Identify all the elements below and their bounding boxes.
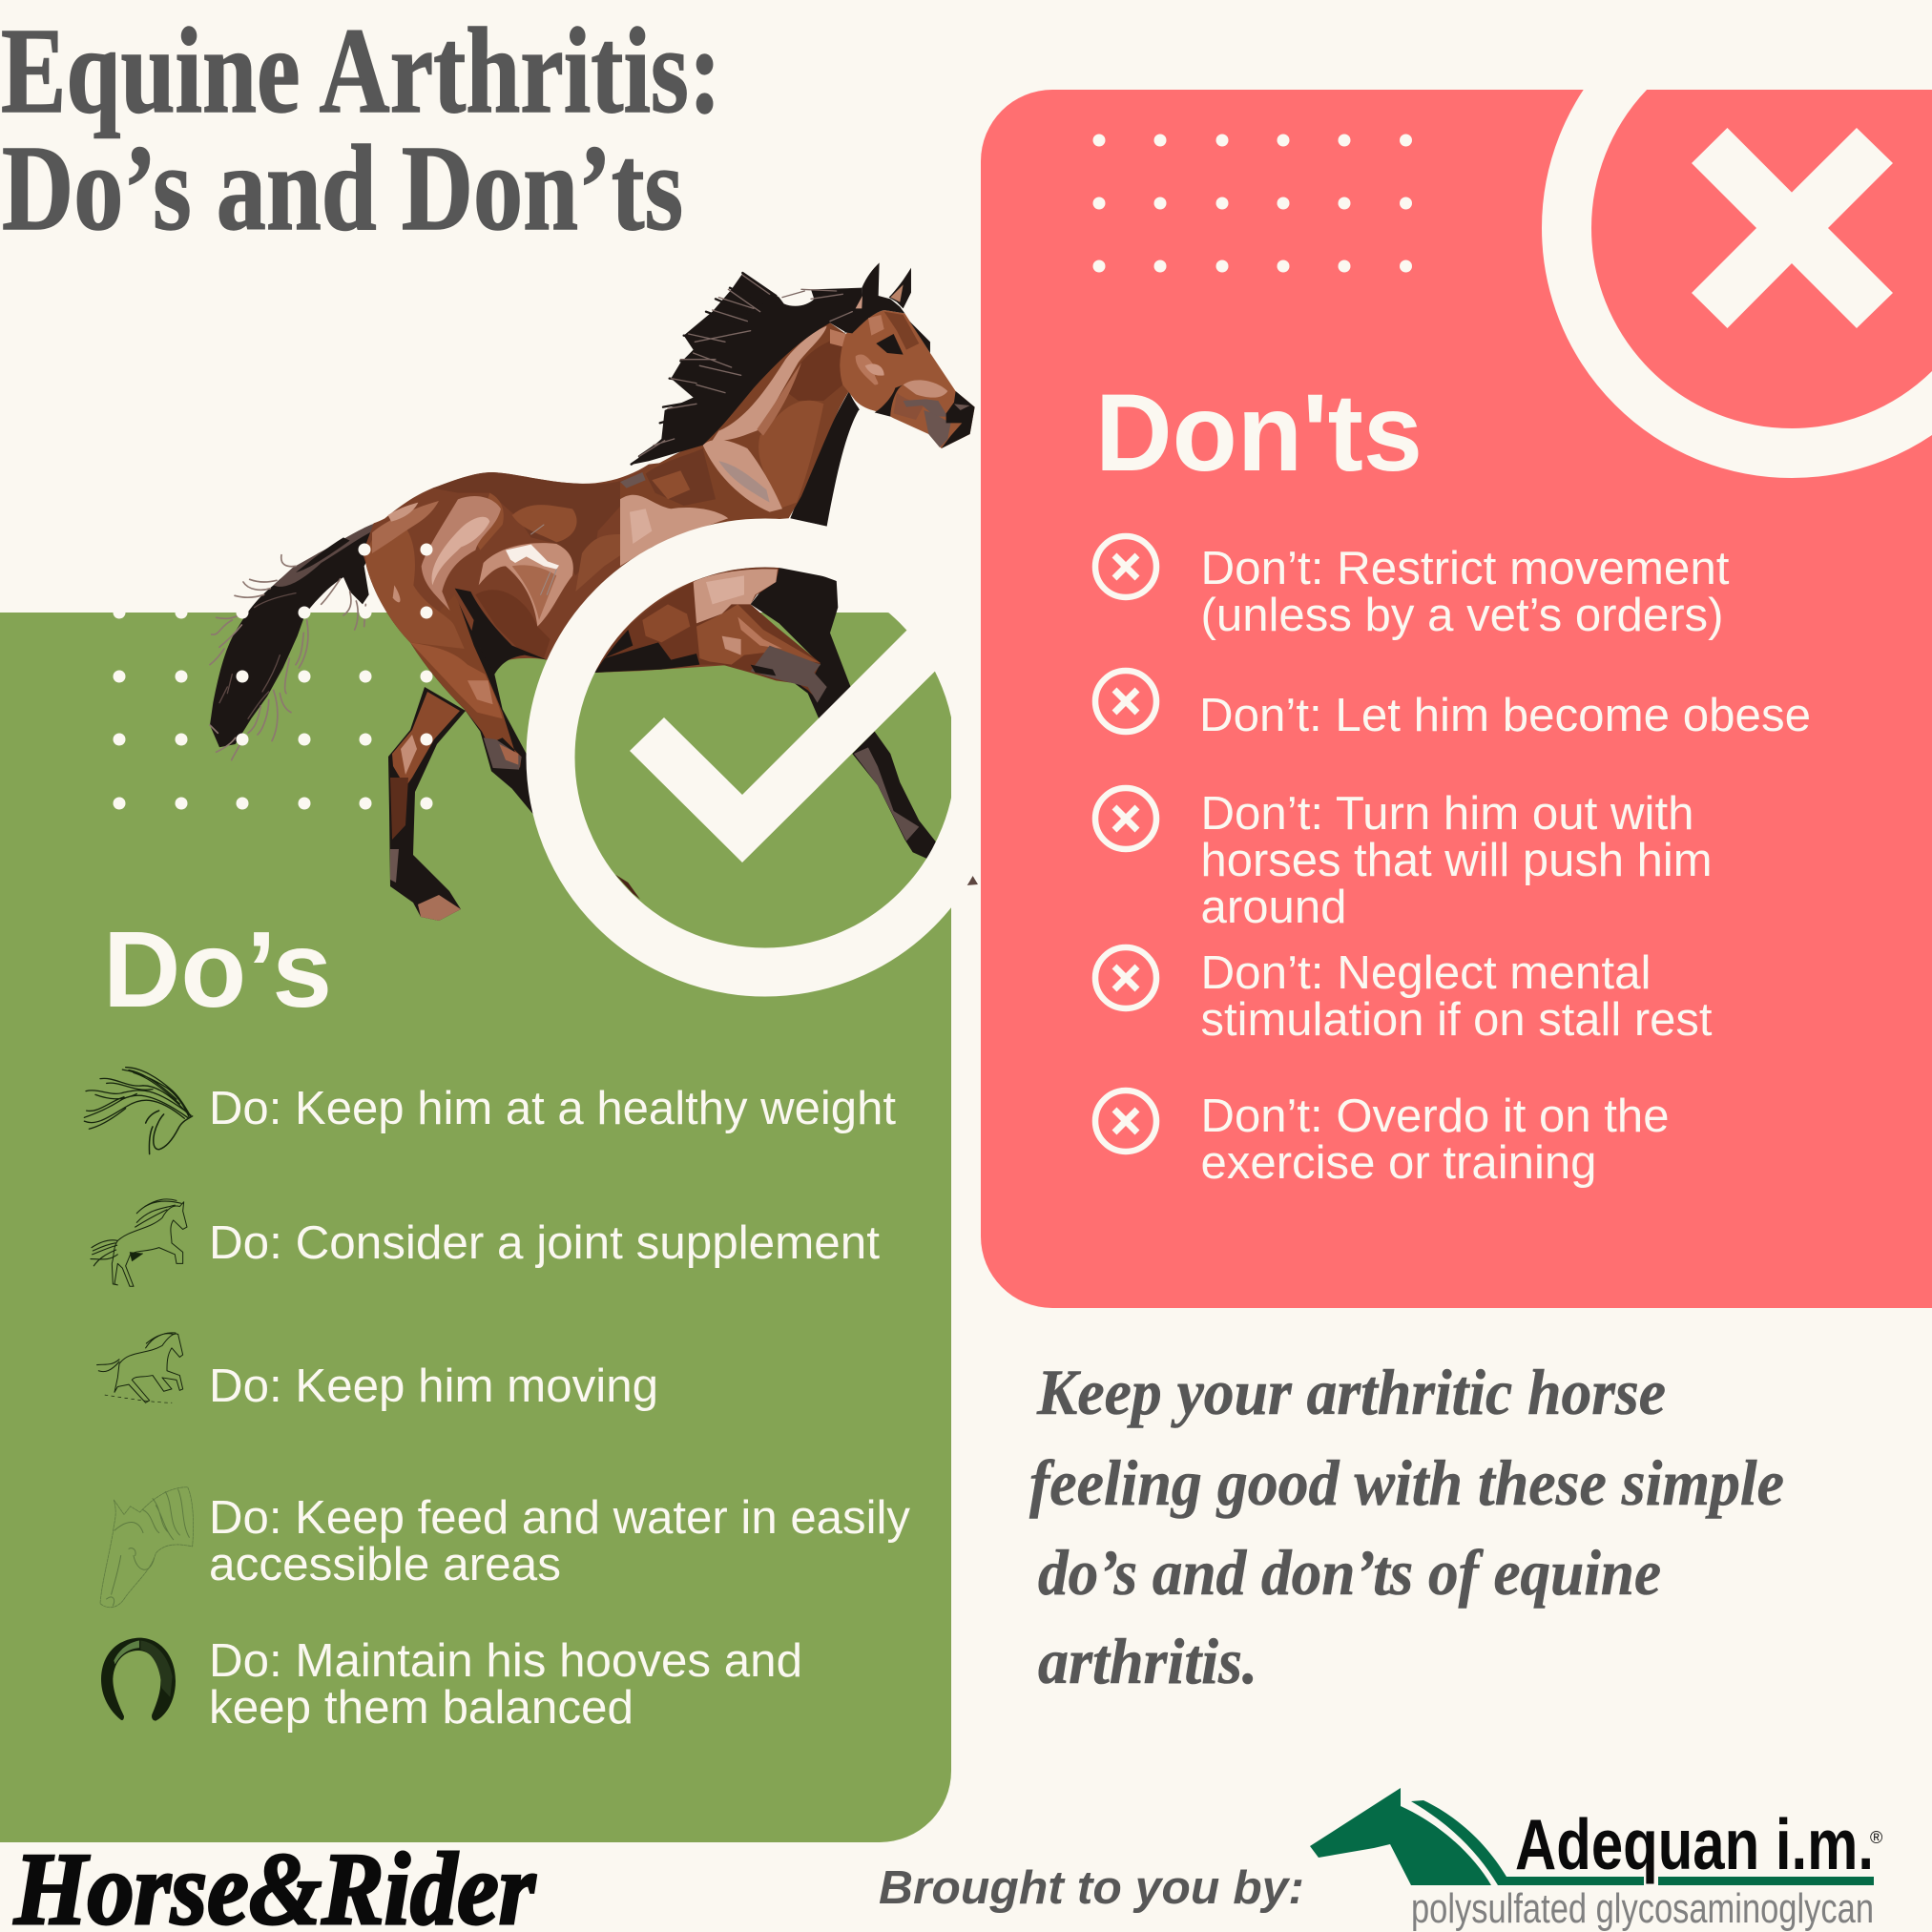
intro paragraph: feeling good with these simple	[1029, 1446, 1784, 1519]
coat: dark back band	[432, 472, 633, 575]
don't item 2	[1095, 671, 1811, 741]
don't item 1: (unless by a vet’s orders)	[1200, 590, 1723, 641]
dot grid: do's	[113, 544, 433, 809]
intro paragraph	[1029, 1356, 1784, 1697]
intro paragraph: arthritis.	[1038, 1625, 1257, 1697]
do item 1: healthy weight: Do: Keep him at a healthy weight	[209, 1083, 896, 1134]
coat: mid orange-brown	[512, 505, 577, 542]
grey streaks	[531, 499, 639, 594]
don't item 2: Don’t: Let him become obese	[1199, 690, 1811, 741]
title	[1, 3, 721, 256]
don't item 4: Don’t: Neglect mental	[1200, 947, 1651, 999]
title: Do’s and Don’ts	[2, 120, 683, 256]
title: Equine Arthritis:	[1, 3, 721, 138]
raised foreleg inside ring	[594, 567, 937, 900]
body	[363, 458, 735, 675]
sponsor line: Brought to you by:	[879, 1862, 1304, 1914]
don'ts list	[1095, 536, 1811, 1189]
dot grid: don'ts	[1093, 134, 1412, 273]
heading: don'ts: Don'ts	[1095, 372, 1423, 494]
stray hoof tip	[966, 875, 978, 885]
panel: do's background	[0, 613, 951, 1842]
don't item 4	[1095, 947, 1713, 1046]
tail	[210, 522, 382, 760]
don't item 4: stimulation if on stall rest	[1200, 994, 1713, 1046]
don't item 1	[1095, 536, 1730, 641]
don't item 3	[1095, 788, 1712, 933]
do item 4: feed and water: accessible areas	[209, 1539, 561, 1590]
horse illustration	[210, 262, 978, 921]
don't item 3: Don’t: Turn him out with	[1200, 788, 1694, 840]
heading: do's: Do’s	[103, 909, 332, 1029]
do item 5: hooves: keep them balanced	[209, 1682, 634, 1734]
don't item 5	[1095, 1091, 1670, 1189]
don't item 3: horses that will push him	[1200, 835, 1712, 886]
coat: rib sheen	[479, 543, 573, 627]
check badge ring	[551, 543, 980, 972]
don't item 1: Don’t: Restrict movement	[1200, 543, 1730, 594]
do item 5: hooves	[101, 1635, 802, 1734]
intro paragraph: Keep your arthritic horse	[1036, 1356, 1666, 1428]
don't item 3: around	[1200, 882, 1347, 933]
logo: Adequan	[1310, 1788, 1882, 1932]
panel: don'ts background	[981, 90, 1932, 1308]
do item 5: hooves: Do: Maintain his hooves and	[209, 1635, 802, 1687]
do item 2: joint supplement: Do: Consider a joint supplement	[209, 1217, 880, 1269]
far hind leg	[388, 687, 466, 921]
do item 1: healthy weight	[84, 1068, 896, 1154]
belly shadow	[455, 589, 547, 675]
x mark	[1692, 128, 1893, 328]
near hind leg and hip	[365, 563, 533, 815]
don't item 5: Don’t: Overdo it on the	[1200, 1091, 1670, 1142]
check mark	[630, 545, 992, 862]
coat: hip highlights	[372, 501, 439, 553]
do item 4: feed and water: Do: Keep feed and water in easily	[209, 1492, 910, 1544]
mane	[632, 273, 862, 465]
do's list	[84, 1068, 910, 1734]
head	[840, 262, 975, 448]
do item 3: keep moving: Do: Keep him moving	[209, 1361, 658, 1412]
registered mark: ®	[1870, 1828, 1882, 1847]
intro paragraph: do’s and don’ts of equine	[1038, 1536, 1661, 1609]
neck and chest	[620, 322, 860, 566]
do item 3: keep moving	[97, 1333, 658, 1412]
horse head mark	[1310, 1788, 1874, 1885]
do item 2: joint supplement	[91, 1199, 880, 1286]
x badge circle	[1567, 3, 1932, 453]
coat: shoulder highlight	[622, 497, 703, 553]
don't item 5: exercise or training	[1200, 1137, 1597, 1189]
do item 4: feed and water	[100, 1487, 910, 1608]
